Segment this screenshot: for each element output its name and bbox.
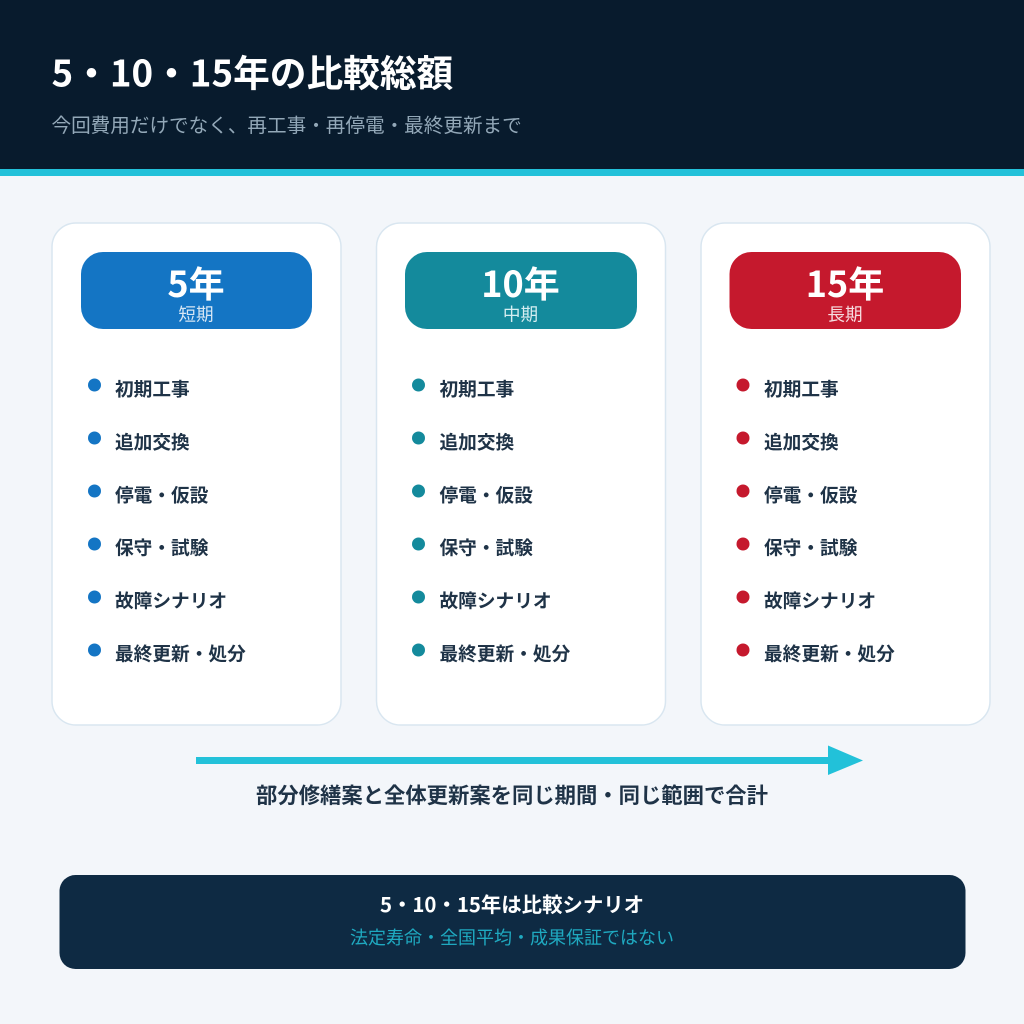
title: 5・10・15年の比較総額 bbox=[52, 44, 454, 98]
list: 5 years items: 初期工事 bbox=[115, 375, 190, 402]
arrow bbox=[196, 746, 863, 775]
list: 10 years items: 停電・仮設 bbox=[440, 481, 533, 508]
badge: 10 years mid term: 10年 bbox=[481, 256, 560, 308]
list: 10 years items: 故障シナリオ bbox=[440, 586, 552, 614]
badge: 5 years short term: 短期 bbox=[178, 302, 214, 326]
badge: 15 years long term: 15年 bbox=[806, 256, 884, 308]
list: 5 years items: 追加交換 bbox=[115, 428, 190, 455]
badge: 15 years long term bbox=[730, 252, 961, 329]
panel: 15 years bbox=[701, 223, 990, 725]
badge: 10 years mid term: 中期 bbox=[503, 302, 538, 326]
list: 5 years items: 保守・試験 bbox=[115, 534, 209, 560]
badge: 15 years long term: 長期 bbox=[827, 302, 863, 326]
list: 5 years items: 停電・仮設 bbox=[115, 481, 209, 508]
subtitle: 今回費用だけでなく、再工事・再停電・最終更新まで bbox=[52, 109, 522, 138]
list: 15 years items: 停電・仮設 bbox=[764, 481, 858, 508]
list: 15 years items: 最終更新・処分 bbox=[764, 640, 895, 666]
list: 10 years items bbox=[412, 375, 571, 666]
list: 15 years items: 追加交換 bbox=[764, 428, 839, 455]
list: 15 years items bbox=[736, 375, 895, 666]
panel: 5 years bbox=[52, 223, 341, 725]
note heading: 5・10・15年は比較シナリオ bbox=[380, 888, 644, 918]
list: 5 years items: 最終更新・処分 bbox=[115, 640, 246, 666]
list: 10 years items: 初期工事 bbox=[440, 375, 515, 402]
list: 15 years items: 保守・試験 bbox=[764, 534, 858, 560]
list: 10 years items: 追加交換 bbox=[440, 428, 515, 455]
note box bbox=[60, 875, 966, 969]
list: 10 years items: 保守・試験 bbox=[440, 534, 533, 560]
note subtext: 法定寿命・全国平均・成果保証ではない bbox=[350, 924, 674, 950]
arrow caption: 部分修繕案と全体更新案を同じ期間・同じ範囲で合計 bbox=[256, 779, 768, 810]
header band bbox=[0, 0, 1024, 176]
badge: 10 years mid term bbox=[405, 252, 637, 329]
panel: 10 years bbox=[376, 223, 666, 725]
badge: 5 years short term bbox=[81, 252, 312, 329]
list: 5 years items: 故障シナリオ bbox=[115, 586, 227, 614]
list: 5 years items bbox=[88, 375, 246, 666]
list: 10 years items: 最終更新・処分 bbox=[440, 640, 571, 666]
list: 15 years items: 初期工事 bbox=[764, 375, 839, 402]
list: 15 years items: 故障シナリオ bbox=[764, 586, 876, 614]
badge: 5 years short term: 5年 bbox=[167, 256, 225, 308]
